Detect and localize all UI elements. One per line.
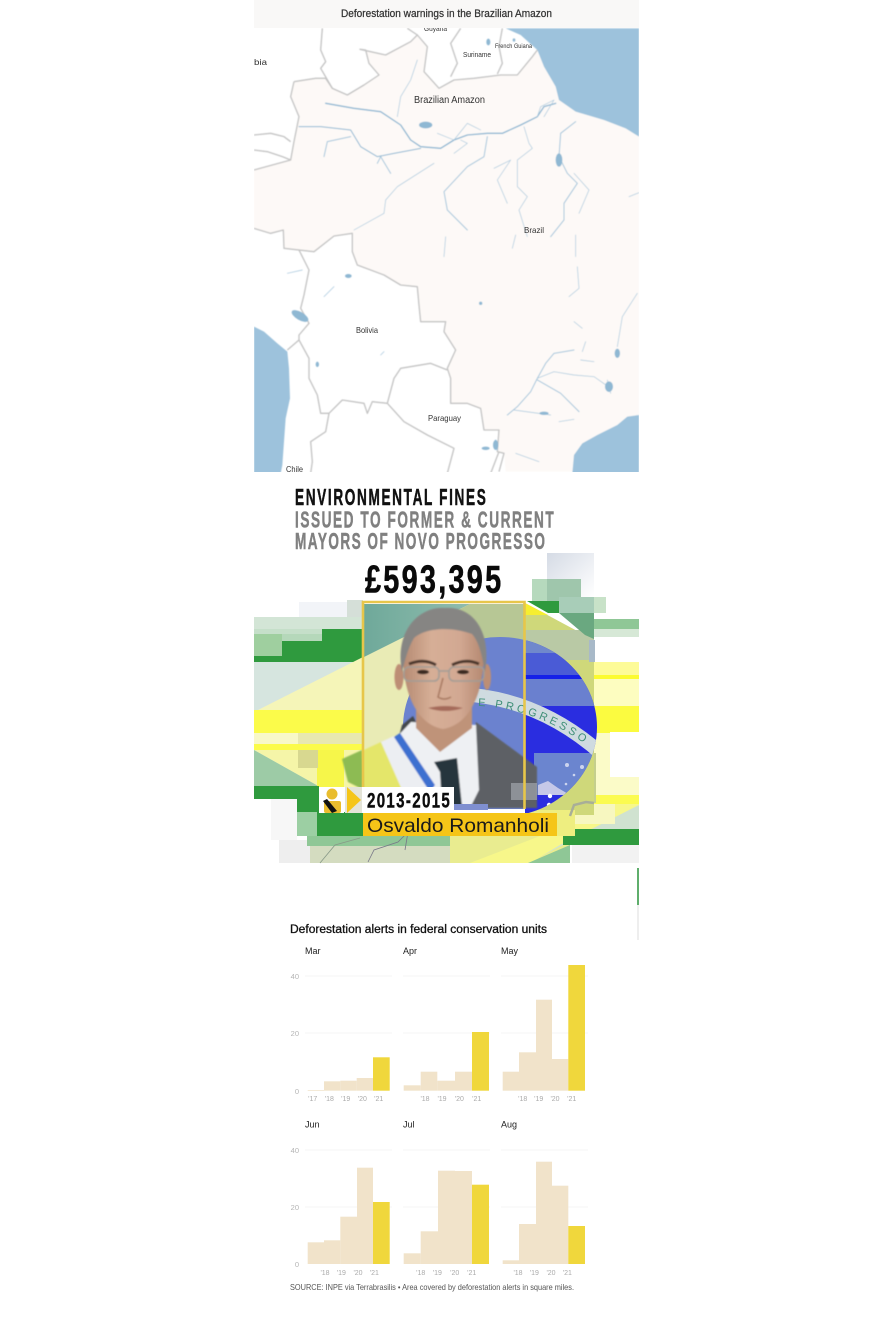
chart: Apr: Apr — [403, 946, 417, 956]
portrait: person — [342, 608, 537, 808]
Brazil landmass — [254, 35, 639, 472]
map labels: Brazilian Amazon — [414, 95, 485, 106]
lakes — [290, 38, 620, 450]
heading line 3: MAYORS OF NOVO PROGRESSO — [295, 529, 545, 555]
chart: Aug: '21 — [563, 1270, 572, 1277]
map header bar — [254, 0, 639, 28]
portrait lower tint — [454, 804, 488, 810]
portrait: sash — [342, 733, 435, 808]
chart: Mar — [305, 946, 390, 1103]
chart: Apr: '20 — [455, 1096, 464, 1103]
chart: May: '19 — [534, 1096, 543, 1103]
chart: Mar: '17 — [308, 1096, 317, 1103]
chart: Jun: '19 — [337, 1270, 346, 1277]
fines headline — [295, 485, 554, 555]
chart: Jun: '21 — [370, 1270, 379, 1277]
y axis labels row 2: 0 — [295, 1260, 299, 1269]
small map shard — [570, 802, 594, 816]
map labels: Brazil — [524, 225, 544, 235]
heading line 2: ISSUED TO FORMER & CURRENT — [295, 508, 554, 534]
portrait frame — [363, 602, 524, 809]
gridlines — [305, 976, 588, 1207]
chart: Aug — [501, 1120, 585, 1277]
edge sliver — [637, 868, 639, 940]
chart: Mar: '18 — [325, 1096, 334, 1103]
map labels: Guyana — [424, 24, 448, 33]
y axis labels row 1: 0 — [295, 1087, 299, 1096]
flag mosaic background — [254, 553, 639, 863]
chart: May: May — [501, 946, 519, 956]
y axis labels row 1 — [291, 972, 299, 1096]
date box: 2013-2015 — [367, 788, 450, 812]
map labels — [254, 24, 544, 474]
name caption — [319, 787, 557, 837]
chart: Jul — [403, 1120, 489, 1277]
chart: Apr: '19 — [437, 1096, 447, 1103]
chart: May — [501, 946, 585, 1103]
map labels: French Guiana — [495, 43, 532, 50]
rivers — [287, 60, 639, 462]
icon: mayor badge — [319, 787, 344, 813]
heading line 1: ENVIRONMENTAL FINES — [295, 485, 486, 511]
chart: Aug: '20 — [546, 1270, 556, 1277]
chart: Apr: '18 — [420, 1096, 430, 1103]
map labels: Chile — [286, 464, 303, 474]
flag diamond right — [525, 603, 594, 815]
portrait: brows, glasses, nose, mouth — [404, 661, 484, 711]
portrait: head — [403, 612, 484, 729]
chart: Apr — [403, 946, 489, 1103]
portrait: tie — [434, 758, 462, 806]
chart: Apr: '21 — [472, 1096, 481, 1103]
map labels: bia — [254, 58, 268, 67]
map labels: Bolivia — [356, 325, 378, 335]
chart: Jun — [305, 1120, 390, 1277]
y axis labels row 2: 40 — [291, 1146, 299, 1155]
map labels: Paraguay — [428, 413, 462, 423]
chart: May: '18 — [518, 1096, 527, 1103]
map labels: Suriname — [463, 50, 491, 59]
portrait panel — [341, 600, 596, 810]
chart: Jun: '18 — [320, 1270, 330, 1277]
chart: Mar: '20 — [358, 1096, 367, 1103]
portrait: hair — [401, 608, 486, 672]
chart: Jul: '19 — [433, 1270, 442, 1277]
y axis labels row 1: 40 — [291, 972, 299, 981]
chart: Jun: Jun — [305, 1120, 320, 1130]
chart: Jun: '20 — [353, 1270, 363, 1277]
fine amount: £593,395 — [365, 558, 501, 602]
map panel: Brazilian Amazon — [254, 0, 639, 474]
chart: Jul: '21 — [467, 1270, 476, 1277]
small-multiple bar charts — [291, 946, 588, 1277]
ocean — [254, 28, 639, 473]
y axis labels row 2: 20 — [291, 1203, 299, 1212]
chart title: Deforestation alerts in federal conservation units — [290, 924, 547, 936]
chart: Aug: Aug — [501, 1120, 517, 1130]
infographic page — [254, 8, 639, 1292]
y axis labels row 2 — [291, 1146, 299, 1269]
flag globe — [525, 637, 600, 817]
portrait: neck — [416, 705, 472, 752]
source note: SOURCE: INPE via Terrabrasilis • Area covered by deforestation alerts in square miles. — [290, 1282, 574, 1292]
portrait motto band — [474, 688, 596, 755]
portrait: suit — [465, 722, 537, 808]
y axis labels row 1: 20 — [291, 1029, 299, 1038]
portrait background — [364, 604, 524, 809]
country borders — [254, 28, 537, 473]
chart: Mar: '19 — [341, 1096, 350, 1103]
chart: Jul: '18 — [416, 1270, 425, 1277]
icon: arrow — [345, 787, 363, 813]
chart: May: '21 — [567, 1096, 576, 1103]
map geography — [254, 24, 639, 474]
map title: Deforestation warnings in the Brazilian Amazon — [341, 8, 552, 20]
portrait motto band: E PROGRESSO — [478, 698, 586, 742]
chart: May: '20 — [550, 1096, 560, 1103]
chart: Aug: '18 — [513, 1270, 523, 1277]
chart: Aug: '19 — [530, 1270, 539, 1277]
chart: Mar: '21 — [374, 1096, 383, 1103]
portrait: shirt — [394, 722, 479, 808]
name box: Osvaldo Romanholi — [367, 815, 549, 837]
chart: Mar: Mar — [305, 946, 321, 956]
chart: Jul: '20 — [450, 1270, 459, 1277]
chart: Jul: Jul — [403, 1120, 415, 1130]
